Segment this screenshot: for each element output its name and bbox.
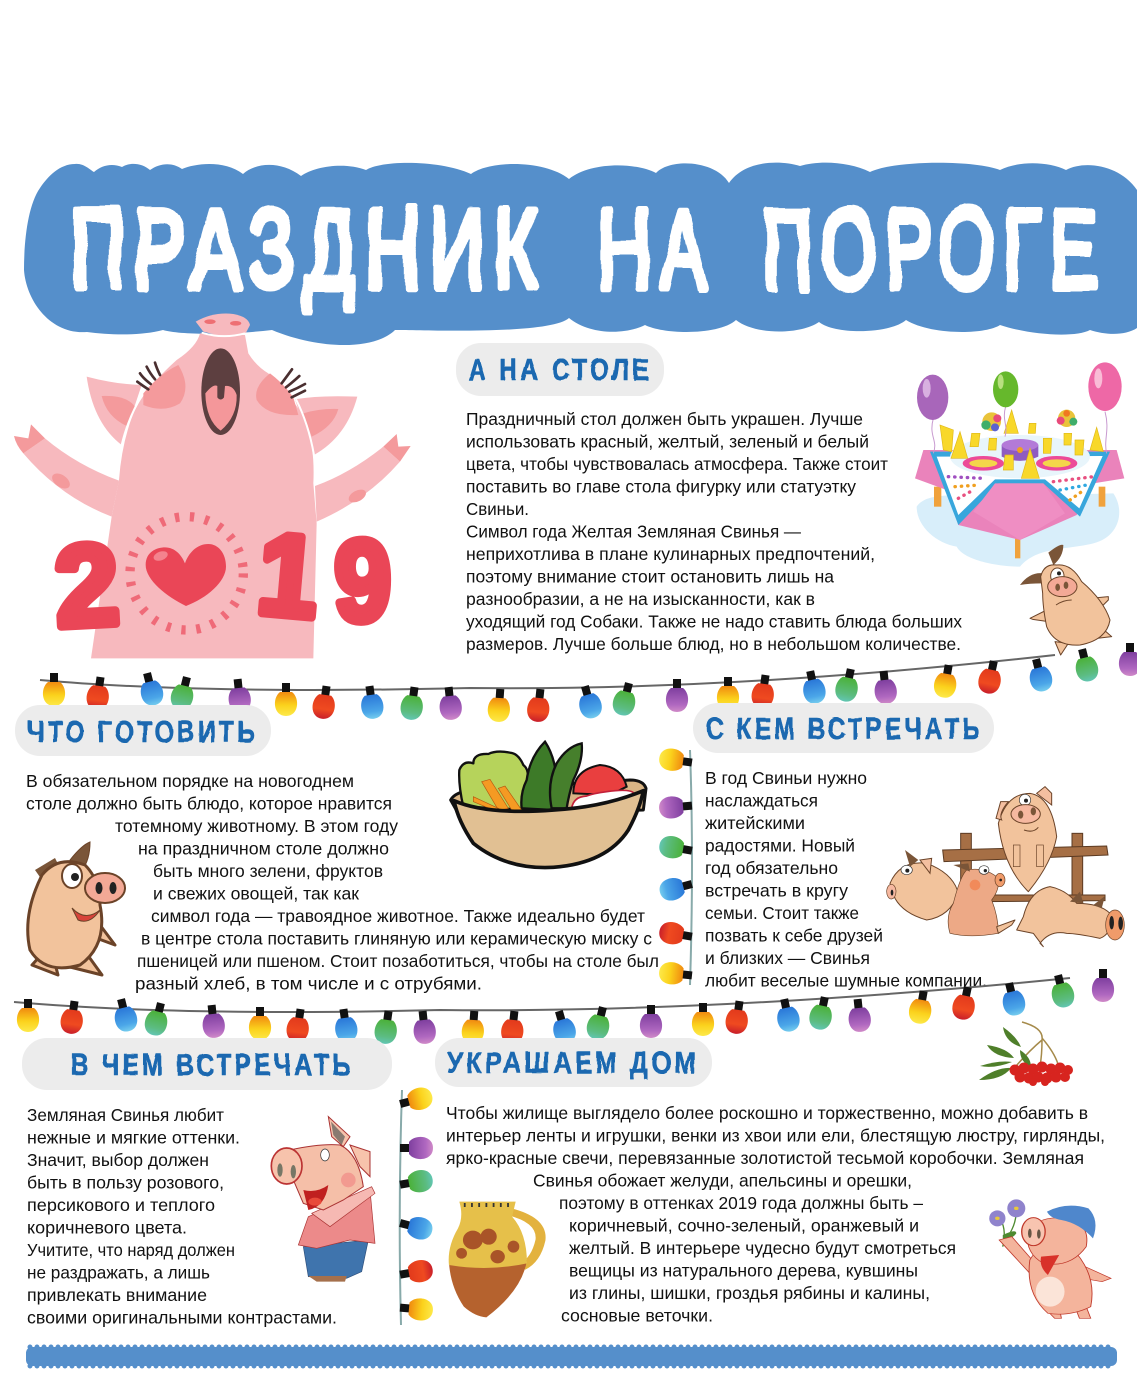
pig body [1041,565,1110,645]
sitting pig [948,863,1015,936]
face [62,864,125,921]
belly [1036,1277,1065,1307]
text: А на столе: поэтому внимание стоит остановить лишь на [466,566,834,586]
carrots [473,779,522,810]
text: С кем встречать: житейскими [705,813,805,833]
text: Украшаем дом [446,1103,1105,1326]
garland: vertical middle [657,747,695,986]
text: В чем встречать: Учитите, что наряд должен [27,1240,235,1260]
text: В чем встречать: Значит, выбор должен [27,1150,209,1170]
heading: В чем встречать: В ЧЕМ ВСТРЕЧАТЬ [71,1047,353,1082]
body [91,333,317,658]
leaves [979,1027,1031,1080]
illustration: pig with flower [989,1199,1111,1318]
illustration: dancing pig [1020,545,1112,655]
left pig [887,850,958,920]
heading: Украшаем дом: УКРАШАЕМ ДОМ [447,1045,699,1080]
text: В чем встречать: своими оригинальными контрастами. [27,1308,337,1328]
text: С кем встречать [705,768,987,990]
text: Что готовить: быть много зелени, фруктов [153,861,383,881]
body [1029,1244,1092,1314]
upper jug [449,1202,527,1268]
text: В чем встречать [27,1105,337,1328]
numerals 2019: 2 [52,520,122,652]
rim marks [464,1199,511,1211]
footer banner [26,1347,1117,1366]
text: Что готовить: пшеницей или пшеном. Стоит позаботиться, чтобы на столе был [137,951,659,971]
shirt [298,1190,375,1248]
banner cloud [24,163,1137,345]
mouth [201,348,240,435]
eyelashes [137,363,305,397]
text: Украшаем дом: Свинья обожает желуди, апельсины и орешки, [533,1170,912,1190]
lettuce [459,752,534,810]
ears and limbs [32,842,115,975]
text: Что готовить: столе должно быть блюдо, которое нравится [26,794,392,814]
painted pattern [456,1229,519,1263]
text: Украшаем дом: ярко-красные свечи, перевязанные золотистой тесьмой коробочки. Земляная [446,1148,1084,1168]
shoe [308,1276,347,1282]
text: В чем встречать: нежные и мягкие оттенки. [27,1128,240,1148]
text: Украшаем дом: вещицы из натурального дерева, кувшины [569,1260,918,1280]
text: А на столе: использовать красный, желтый, зеленый и белый [466,432,869,452]
text: Что готовить [26,771,659,994]
bowl [454,791,643,868]
numerals 2019 [52,510,391,652]
text: В чем встречать: быть в пользу розового, [27,1172,224,1192]
flower [989,1199,1025,1247]
text: С кем встречать: В год Свиньи нужно [705,768,867,788]
text: С кем встречать: позвать к себе друзей [705,926,883,946]
text: А на столе: уходящий год Собаки. Также не надо ставить блюда больших [466,612,962,632]
heading: А на столе: А НА СТОЛЕ [468,352,652,387]
balloons [917,362,1122,453]
arms and feet [999,1237,1111,1318]
fence [943,833,1108,920]
title banner [24,163,1137,345]
text: А на столе: Праздничный стол должен быть украшен. Лучше [466,409,863,429]
text: В чем встречать: привлекать внимание [27,1285,207,1305]
spinach leaves [521,742,557,810]
bowl back rim [451,780,646,817]
text: А на столе: разнообразии, а не на изысканности, как в [466,589,815,609]
lower jug [449,1260,527,1317]
garland: top [40,643,1137,723]
text: С кем встречать: радостями. Новый [705,836,855,856]
text: Украшаем дом: поэтому в оттенках 2019 года должны быть – [559,1193,923,1213]
text: Украшаем дом: интерьер ленты и игрушки, венки из хвои или ели, блестящую люстру, гирлянды, [446,1126,1105,1146]
ears [328,1117,370,1177]
illustration: rowan branch [979,1022,1073,1086]
text: Украшаем дом: из глины, шишки, гроздья рябины и калины, [569,1283,930,1303]
garland: lower [14,969,1114,1046]
text: В чем встречать: не раздражать, а лишь [27,1262,210,1282]
text: Что готовить: в центре стола поставить глиняную или керамическую миску с [141,928,652,948]
confetti stars [948,477,1093,500]
handle [509,1212,541,1267]
cloud under table [917,493,1119,567]
tomato [573,765,627,795]
snout and mouth [271,1148,356,1210]
pig face [1048,568,1077,605]
limbs and ears [1020,545,1112,655]
blue trimmed cloth corners [930,452,1110,525]
garland: vertical bottom [397,1085,435,1325]
text: А на столе: размеров. Лучше больше блюд, но в небольшом количестве. [466,634,961,654]
text: В чем встречать: коричневого цвета. [27,1218,187,1238]
text: В чем встречать: Земляная Свинья любит [27,1105,224,1125]
cap [1047,1206,1096,1238]
trousers [303,1240,368,1278]
head outline highlights [122,393,314,455]
text: С кем встречать: семьи. Стоит также [705,903,859,923]
text: Украшаем дом: желтый. В интерьере чудесно будут смотреться [569,1238,956,1258]
text: А на столе: цвета, чтобы чувствовалась атмосфера. Также стоит [466,454,888,474]
illustration: salad bowl [451,742,646,868]
illustration: pig in pink shirt [271,1117,375,1282]
text: С кем встречать: и близких — Свинья [705,948,870,968]
text: Что готовить: тотемному животному. В этом году [115,816,398,836]
heading: Что готовить: ЧТО ГОТОВИТЬ [27,714,258,749]
stems [1016,1022,1058,1066]
illustration: party table with balloons [915,362,1124,567]
radish slices [572,790,634,808]
body [28,862,102,968]
text: А на столе: неприхотлива в плане кулинарных предпочтений, [466,544,875,564]
title text: ПРАЗДНИК [70,187,548,312]
text: А на столе: Символ года Желтая Земляная Свинья — [466,522,801,542]
text: Что готовить: разный хлеб, в том числе и с отрубями. [135,974,482,994]
text: А на столе: Свиньи. [466,499,529,519]
text: С кем встречать: любит веселые шумные компании. [705,970,987,990]
illustration: waving pig [28,842,125,975]
text: С кем встречать: год обязательно [705,858,838,878]
numerals 2019: 1 [253,510,324,643]
text: Украшаем дом: сосновые веточки. [561,1306,713,1326]
text: Что готовить: и свежих овощей, так как [153,884,359,904]
ears [87,377,357,455]
illustration: clay jug [449,1202,541,1317]
illustration: singing pig with 2019 [14,314,411,658]
illustration: pig family at fence [887,787,1124,947]
head [290,1145,363,1210]
text: А на столе: поставить во главе стола фигурку или статуэтку [466,476,856,496]
text: С кем встречать: наслаждаться [705,790,818,810]
title text [70,187,1106,312]
heart with rays [130,517,243,630]
party hats [940,410,1103,478]
text: Что готовить: В обязательном порядке на новогоднем [26,771,354,791]
top pig [996,787,1057,892]
text: Что готовить: на праздничном столе должно [138,838,389,858]
text: Украшаем дом: Чтобы жилище выглядело более роскошно и торжественно, можно добавить в [446,1103,1088,1123]
title text: НА [598,187,716,312]
cheeks [143,365,298,415]
lying pig [1017,887,1124,947]
arms [14,424,411,522]
numerals 2019: 9 [334,518,391,646]
snout and mouth [1022,1218,1059,1275]
snout [196,314,250,336]
collar [312,1187,375,1227]
head [1027,1218,1087,1264]
text: Что готовить: символ года — травоядное животное. Также идеально будет [151,906,645,926]
berries [1010,1062,1073,1086]
table setting [950,410,1090,478]
table legs [934,487,1105,558]
text: В чем встречать: персикового и теплого [27,1195,215,1215]
heading: С кем встречать: С КЕМ ВСТРЕЧАТЬ [706,711,983,746]
table cloth [915,450,1124,540]
text: С кем встречать: встречать в кругу [705,880,848,900]
text: Украшаем дом: коричневый, сочно-зеленый, оранжевый и [569,1216,919,1236]
text: А на столе [466,409,962,654]
